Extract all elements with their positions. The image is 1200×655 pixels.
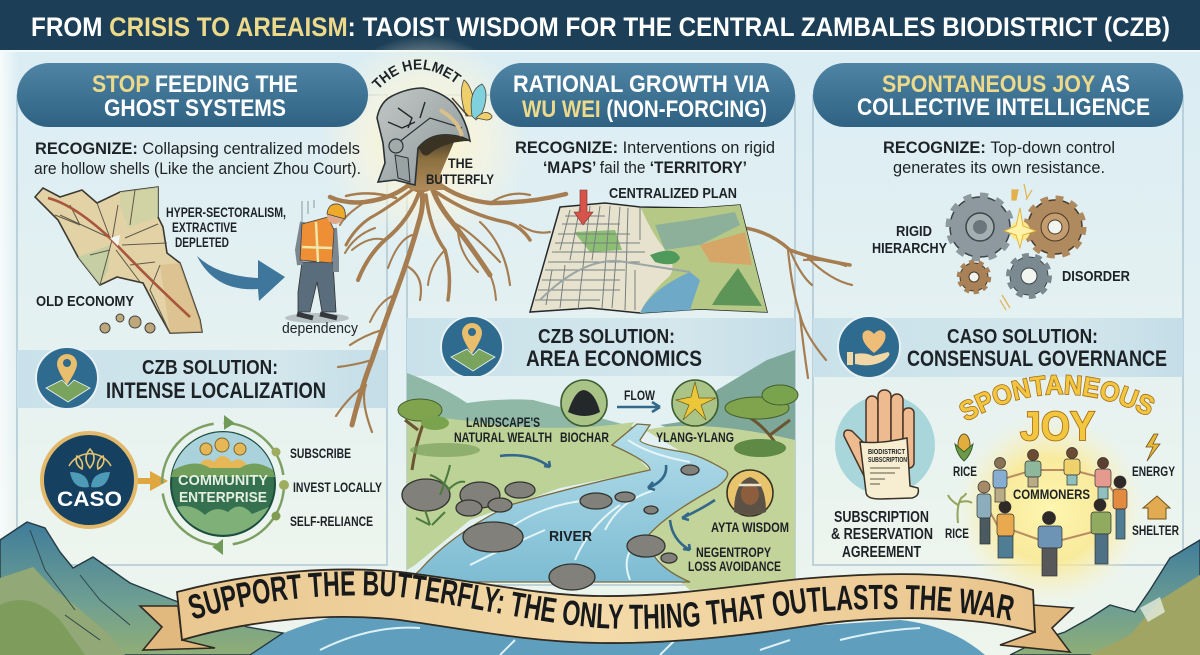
center recognize text: RECOGNIZE: Interventions on rigid [515,138,775,157]
left pill heading [17,63,368,127]
joy resource labels [945,464,1179,541]
map labels: HYPER-SECTORALISM, [166,205,286,220]
helmet glow [320,35,530,245]
map labels: OLD ECONOMY [36,293,134,310]
icon: clashing gears [949,184,1083,310]
right solution heading [907,326,1167,371]
right recognize text: RECOGNIZE: Top-down control [883,138,1115,157]
trees [398,385,798,525]
dependency label: dependency [282,320,358,337]
arrow: caso to community [138,471,168,491]
icon: raised hand with subscription document [835,390,935,499]
left recognize text [34,139,361,178]
panel: center frame [407,95,795,585]
bottom river [240,612,985,655]
left recognize text: are hollow shells (Like the ancient Zhou Court). [34,159,361,178]
left pill heading: GHOST SYSTEMS [104,95,286,122]
icon: ylang-ylang flower [672,380,718,426]
river landscape scene [407,350,795,590]
center pill heading: RATIONAL GROWTH VIA [513,71,770,98]
butterfly label: THE [448,155,473,171]
community enterprise badge [162,417,289,553]
icon: butterfly [452,80,492,120]
icon: ayta elder [727,470,773,516]
scene labels: BIOCHAR [560,430,609,445]
right pill heading [813,63,1183,127]
spontaneous joy heading: SPONTANEOUS [959,374,1155,420]
right mountains [1010,540,1200,655]
center recognize text: ‘MAPS’ fail the ‘TERRITORY’ [543,158,747,177]
community actions: SUBSCRIBE [290,446,351,461]
icon: raised hand with subscription document: BIODISTRICT [868,447,905,456]
icon: corn [955,434,973,461]
scene labels: YLANG-YLANG [656,430,734,445]
left solution heading: CZB SOLUTION: [142,357,278,379]
red arrow [574,190,593,225]
left mountains [0,522,283,655]
fold-out map [530,203,767,313]
gear labels: RIGID [896,223,932,240]
joy resource labels: SHELTER [1132,523,1179,538]
joy resource labels: RICE [953,464,977,479]
community actions [290,446,382,529]
panel: right frame [813,95,1183,565]
community enterprise badge: COMMUNITY [178,472,268,489]
scene labels: NEGENTROPY [696,545,771,560]
left recognize text: RECOGNIZE: Collapsing centralized models [35,139,360,158]
helmet [377,88,470,190]
arrow: economy to dependency [197,256,285,301]
right recognize text [883,138,1115,177]
icon: left location pin [36,347,98,409]
community actions: SELF-RELIANCE [290,514,373,529]
scene labels: NATURAL WEALTH [454,430,552,445]
community enterprise badge: ENTERPRISE [179,489,267,506]
icon: raised hand with subscription document: SUBSCRIPTION [868,455,907,464]
scene labels: LANDSCAPE'S [466,415,540,430]
scene labels: LOSS AVOIDANCE [688,559,781,574]
icon: biochar [561,380,607,426]
panel: left frame [17,95,387,565]
scene labels: RIVER [549,528,592,545]
banner: SUPPORT THE BUTTERFLY: THE ONLY THING THAT OUTLASTS THE WAR [188,571,1014,629]
butterfly label [426,155,495,187]
right pill heading: SPONTANEOUS JOY AS [882,71,1130,98]
icon: rice stalk [948,493,972,523]
rocks [402,465,699,590]
center pill heading [490,63,795,127]
icon: house [1143,496,1170,519]
center solution heading [526,326,702,371]
agreement label: AGREEMENT [842,544,921,561]
caso badge: CASO [57,488,122,511]
commoners label: COMMONERS [1013,486,1090,502]
center solution heading: AREA ECONOMICS [526,346,702,371]
flow arrows [500,402,715,550]
joy glow [955,415,1145,605]
agreement label: & RESERVATION [831,526,933,543]
agreement label: SUBSCRIPTION [834,509,929,526]
right pill heading: COLLECTIVE INTELLIGENCE [857,94,1150,121]
gear labels: DISORDER [1062,268,1130,285]
map labels: DEPLETED [175,235,229,250]
icon: center location pin [441,316,503,378]
left solution heading: INTENSE LOCALIZATION [106,378,326,403]
center recognize text [515,138,775,177]
caso badge [42,433,136,527]
scene labels: FLOW [624,388,655,403]
spontaneous joy heading [959,374,1155,449]
gear labels [872,223,1130,285]
title bar [0,0,1200,52]
center pill heading: WU WEI (NON-FORCING) [522,96,767,123]
butterfly label: BUTTERFLY [426,171,495,187]
joy resource labels: RICE [945,526,969,541]
agreement label [831,509,933,561]
right recognize text: generates its own resistance. [893,158,1105,177]
centralized plan label: CENTRALIZED PLAN [609,185,737,202]
central root system [330,178,852,432]
left solution heading [106,357,326,403]
map labels [36,205,286,310]
community actions: INVEST LOCALLY [293,480,382,495]
banner [138,568,1075,653]
helmet label: THE HELMET [371,59,462,88]
icon: tired worker [285,200,349,323]
scene labels [454,388,789,574]
right solution heading: CASO SOLUTION: [947,326,1098,348]
cracked old economy map [35,187,202,333]
joy resource labels: ENERGY [1132,464,1175,479]
center solution heading: CZB SOLUTION: [538,326,675,348]
left pill heading: STOP FEEDING THE [92,71,298,98]
gear labels: HIERARCHY [872,240,947,257]
icon: lightning [1146,434,1160,461]
scene labels: AYTA WISDOM [711,520,789,535]
map labels: EXTRACTIVE [172,220,237,235]
spontaneous joy heading: JOY [1020,403,1095,449]
commoners circle [977,448,1127,576]
icon: heart in hand [838,316,900,378]
